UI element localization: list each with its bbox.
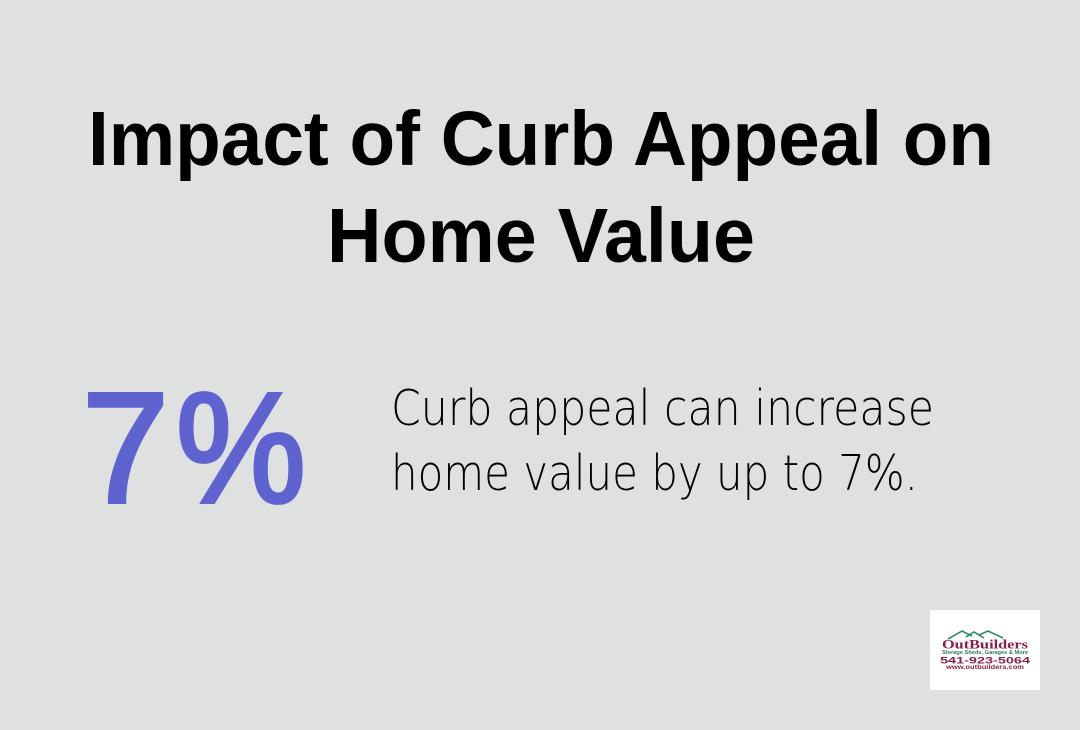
logo website: www.outbuilders.com	[945, 665, 1024, 671]
logo: OutBuilders	[930, 610, 1040, 690]
big statistic: 7%	[82, 361, 306, 536]
logo icon: rooflines	[948, 631, 1003, 639]
description text: home value by up to 7%.	[391, 445, 918, 502]
big statistic: 7%: 7	[82, 361, 169, 536]
description text	[391, 380, 934, 502]
logo name: OutBuilders	[942, 638, 1028, 652]
logo tagline: Storage Sheds, Garages & More	[942, 650, 1028, 656]
description text: Curb appeal can increase	[391, 380, 934, 437]
big statistic: 7%: %	[176, 361, 306, 536]
title: Home Value	[327, 193, 755, 279]
title	[88, 96, 994, 279]
title: Impact of Curb Appeal on	[88, 96, 994, 182]
logo phone: 541-923-5064	[940, 656, 1030, 666]
